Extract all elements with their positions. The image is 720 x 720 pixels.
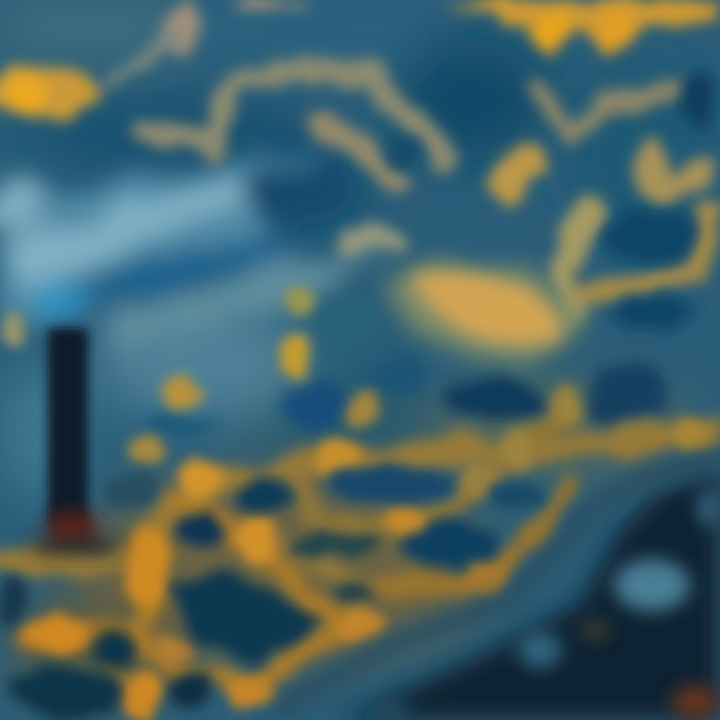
diagonal band and pale cells (280, 458, 719, 718)
dark cells lower (0, 467, 548, 718)
orange nodes (0, 285, 710, 719)
dark blue cells upper right (145, 70, 718, 437)
yellow sun and top accents (0, 0, 720, 116)
tower base in red (28, 511, 120, 555)
dark tower column (28, 328, 120, 555)
light blue swath (0, 150, 400, 350)
orange network lower (0, 410, 715, 700)
golden central blob (385, 259, 578, 358)
dark lower right corner (340, 470, 720, 720)
tan network strands upper (150, 70, 710, 310)
